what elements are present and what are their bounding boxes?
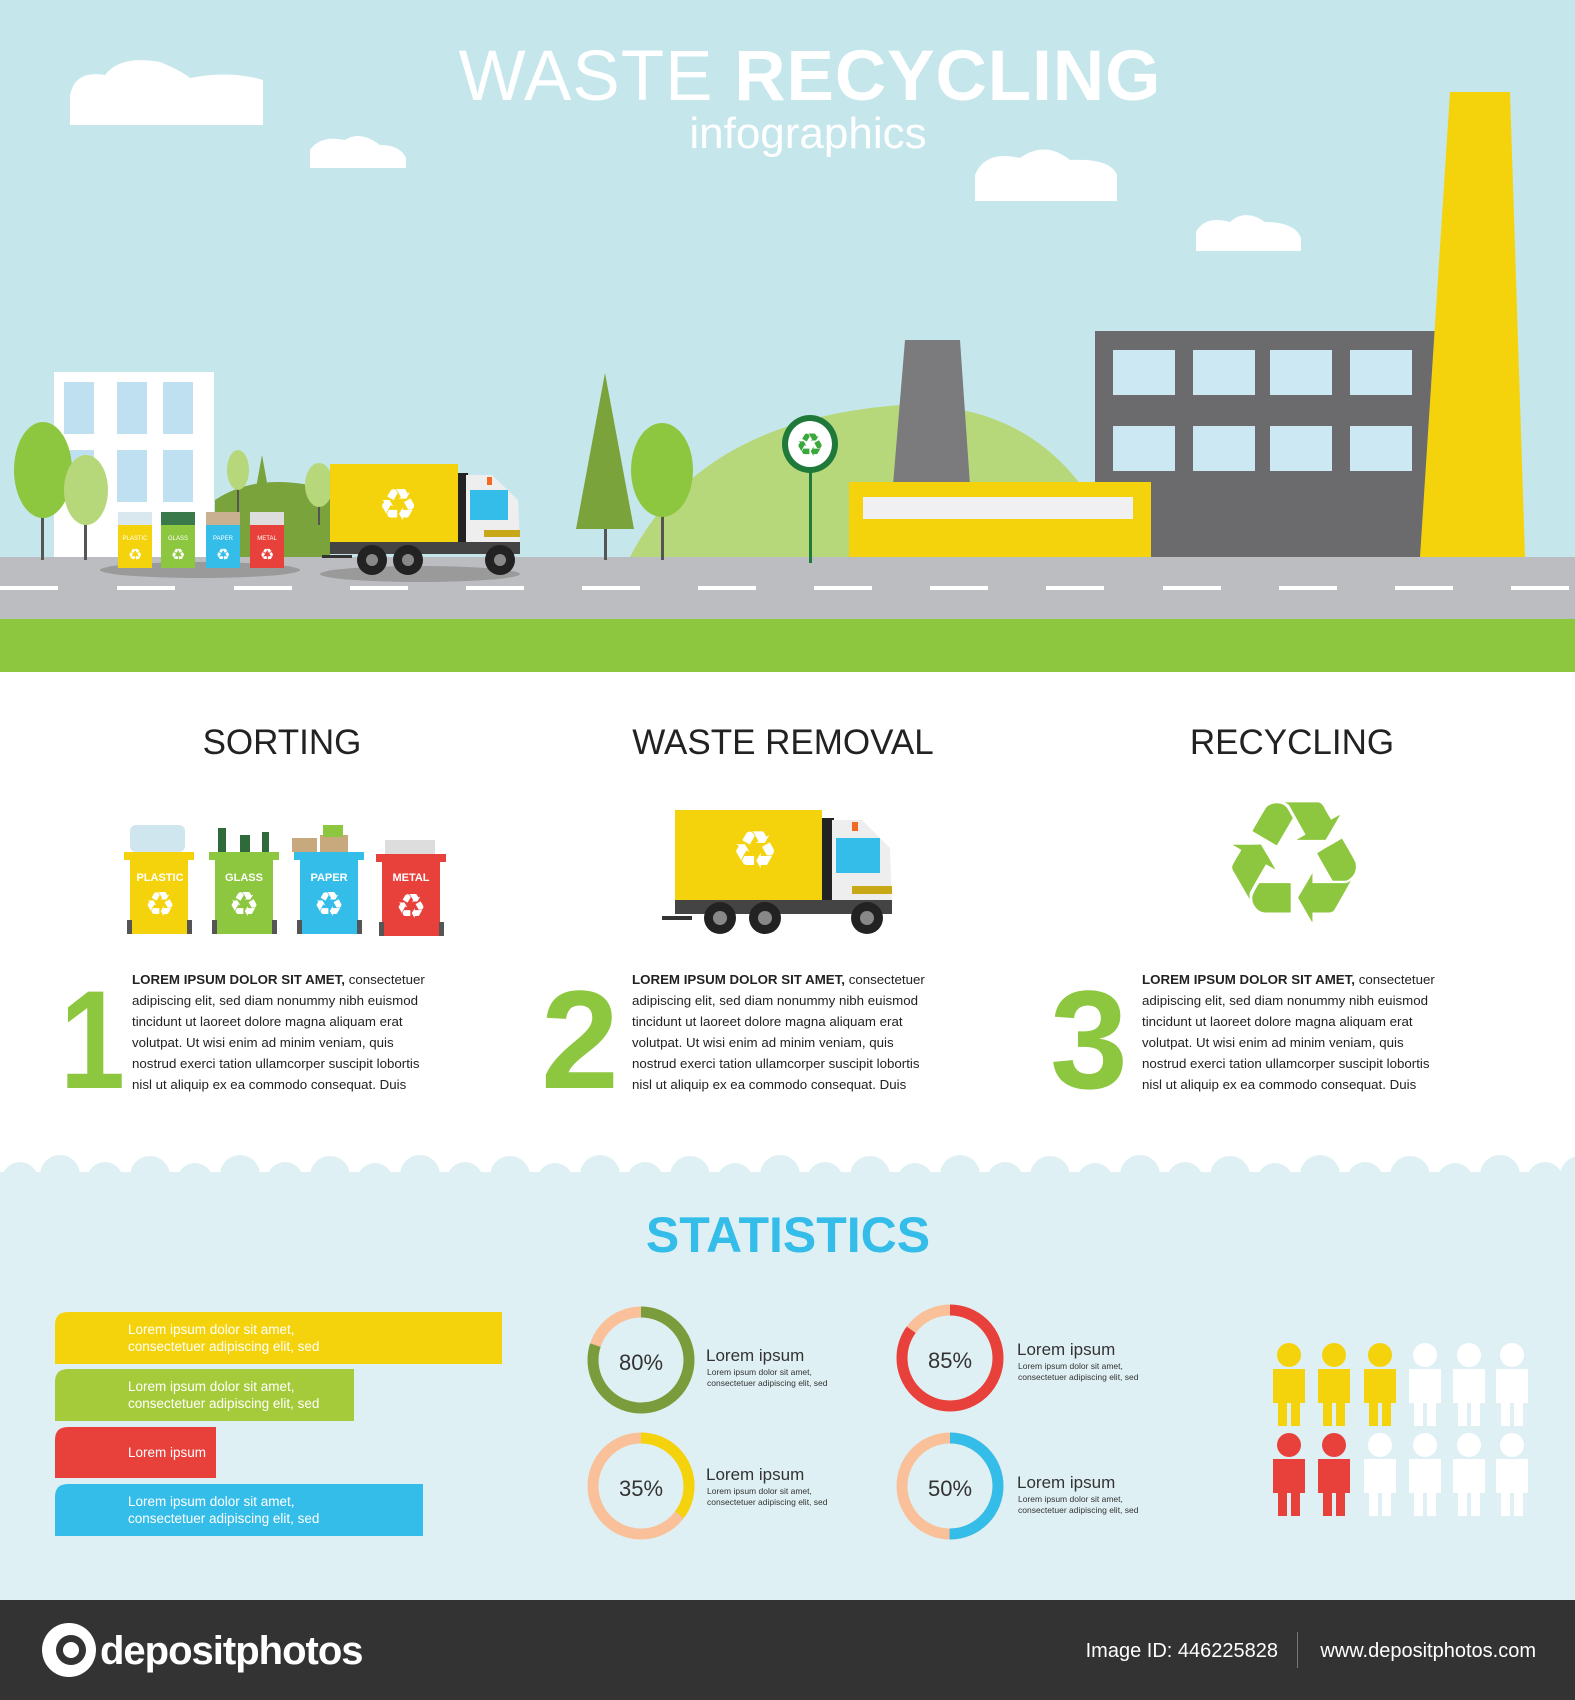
small bins: PAPER (213, 536, 234, 542)
people chart (1273, 1343, 1528, 1516)
donut 85%: Lorem ipsum dolor sit amet, (1018, 1361, 1123, 1371)
number 2: 2 (541, 961, 619, 1118)
donut 35%: Lorem ipsum (706, 1465, 804, 1484)
factory (849, 92, 1525, 557)
text 1: LOREM IPSUM DOLOR SIT AMET, consectetuer (132, 972, 425, 987)
donut 35%: consectetuer adipiscing elit, sed (707, 1497, 828, 1507)
text 3 (1142, 972, 1435, 1092)
text 3: volutpat. Ut wisi enim ad minim veniam, quis (1142, 1035, 1404, 1050)
section 1: sorting (60, 723, 446, 1118)
recycle sign (782, 415, 838, 563)
statistics background (0, 1155, 1575, 1602)
donut 85%: 85% (928, 1348, 972, 1373)
white building (54, 372, 214, 557)
text 3: LOREM IPSUM DOLOR SIT AMET, consectetuer (1142, 972, 1435, 987)
bins: PAPER (310, 872, 348, 884)
donut 85%: Lorem ipsum (1017, 1340, 1115, 1359)
text 3: tincidunt ut laoreet dolore magna aliquam erat (1142, 1014, 1413, 1029)
text 3: adipiscing elit, sed diam nonummy nibh euismod (1142, 993, 1428, 1008)
footer (0, 1600, 1575, 1700)
title: WASTE RECYCLING (459, 37, 1161, 116)
bar chart: Lorem ipsum dolor sit amet, (128, 1322, 295, 1337)
section 3: recycling (1050, 723, 1435, 1118)
donut 80%: Lorem ipsum dolor sit amet, (707, 1367, 812, 1377)
title (459, 37, 1161, 158)
bar chart: Lorem ipsum dolor sit amet, (128, 1379, 295, 1394)
small bins: ♻ (260, 547, 274, 564)
donut 50% (902, 1438, 1139, 1534)
footer logo (42, 1623, 363, 1677)
bar chart: consectetuer adipiscing elit, sed (128, 1511, 319, 1526)
text 3: nisl ut aliquip ex ea commodo consequat. Duis (1142, 1077, 1417, 1092)
donut 35%: 35% (619, 1476, 663, 1501)
title: infographics (689, 109, 927, 158)
donut 50%: 50% (928, 1476, 972, 1501)
statistics heading: STATISTICS (646, 1207, 930, 1263)
text 2: adipiscing elit, sed diam nonummy nibh euismod (632, 993, 918, 1008)
bins: ♻ (145, 886, 175, 924)
bins: ♻ (229, 886, 259, 924)
trees (14, 373, 693, 560)
small bins: PLASTIC (122, 536, 148, 542)
donut 50%: Lorem ipsum dolor sit amet, (1018, 1494, 1123, 1504)
road (0, 557, 1575, 619)
small bins: ♻ (171, 547, 185, 564)
text 2 (632, 972, 925, 1092)
bins (124, 825, 446, 936)
small truck: ♻ (378, 481, 418, 530)
text 2: nisl ut aliquip ex ea commodo consequat. Duis (632, 1077, 907, 1092)
truck: ♻ (732, 822, 778, 880)
number 3: 3 (1050, 961, 1128, 1118)
recycle icon: ♻ (1218, 769, 1370, 959)
donut 50%: consectetuer adipiscing elit, sed (1018, 1505, 1139, 1515)
donut 85% (902, 1310, 1139, 1406)
donut 85%: consectetuer adipiscing elit, sed (1018, 1372, 1139, 1382)
donut 35%: Lorem ipsum dolor sit amet, (707, 1486, 812, 1496)
bins: GLASS (225, 872, 263, 884)
hills (215, 405, 1120, 557)
small bins: ♻ (216, 547, 230, 564)
donut 80%: 80% (619, 1350, 663, 1375)
donut 35% (593, 1438, 828, 1534)
bar chart: consectetuer adipiscing elit, sed (128, 1339, 319, 1354)
text 1 (132, 972, 425, 1092)
footer id: Image ID: 446225828 (1086, 1640, 1278, 1662)
footer: www.depositphotos.com (1319, 1640, 1536, 1662)
donut 80%: Lorem ipsum (706, 1346, 804, 1365)
text 2: nostrud exerci tation ullamcorper suscipit lobortis (632, 1056, 920, 1071)
bins: METAL (392, 872, 430, 884)
text 1: tincidunt ut laoreet dolore magna aliquam erat (132, 1014, 403, 1029)
bar chart (55, 1312, 502, 1536)
recycle sign: ♻ (796, 427, 824, 463)
bins: ♻ (314, 886, 344, 924)
small bins (100, 512, 300, 578)
small bins: METAL (257, 536, 277, 542)
text 3: nostrud exerci tation ullamcorper suscipit lobortis (1142, 1056, 1430, 1071)
section 2: waste removal (541, 723, 934, 1118)
section 3: recycling: RECYCLING (1190, 723, 1394, 762)
text 2: tincidunt ut laoreet dolore magna aliquam erat (632, 1014, 903, 1029)
bins: ♻ (396, 888, 426, 926)
text 1: adipiscing elit, sed diam nonummy nibh euismod (132, 993, 418, 1008)
text 1: nisl ut aliquip ex ea commodo consequat. Duis (132, 1077, 407, 1092)
donut 50%: Lorem ipsum (1017, 1473, 1115, 1492)
bar chart: consectetuer adipiscing elit, sed (128, 1396, 319, 1411)
number 1: 1 (60, 961, 125, 1118)
text 2: LOREM IPSUM DOLOR SIT AMET, consectetuer (632, 972, 925, 987)
truck (662, 810, 892, 934)
section 2: waste removal: WASTE REMOVAL (632, 723, 934, 762)
text 1: volutpat. Ut wisi enim ad minim veniam, quis (132, 1035, 394, 1050)
text 2: volutpat. Ut wisi enim ad minim veniam, quis (632, 1035, 894, 1050)
sky background (0, 0, 1575, 560)
donut 80%: consectetuer adipiscing elit, sed (707, 1378, 828, 1388)
small truck (320, 464, 520, 582)
clouds (70, 60, 1301, 251)
small bins: ♻ (128, 547, 142, 564)
grass strip (0, 619, 1575, 672)
donut 80% (593, 1312, 828, 1408)
bar chart: Lorem ipsum (128, 1445, 206, 1460)
text 1: nostrud exerci tation ullamcorper suscipit lobortis (132, 1056, 420, 1071)
small bins: GLASS (168, 536, 188, 542)
bar chart: Lorem ipsum dolor sit amet, (128, 1494, 295, 1509)
section 1: sorting: SORTING (203, 723, 361, 762)
footer logo: depositphotos (100, 1629, 363, 1673)
bins: PLASTIC (136, 872, 184, 884)
